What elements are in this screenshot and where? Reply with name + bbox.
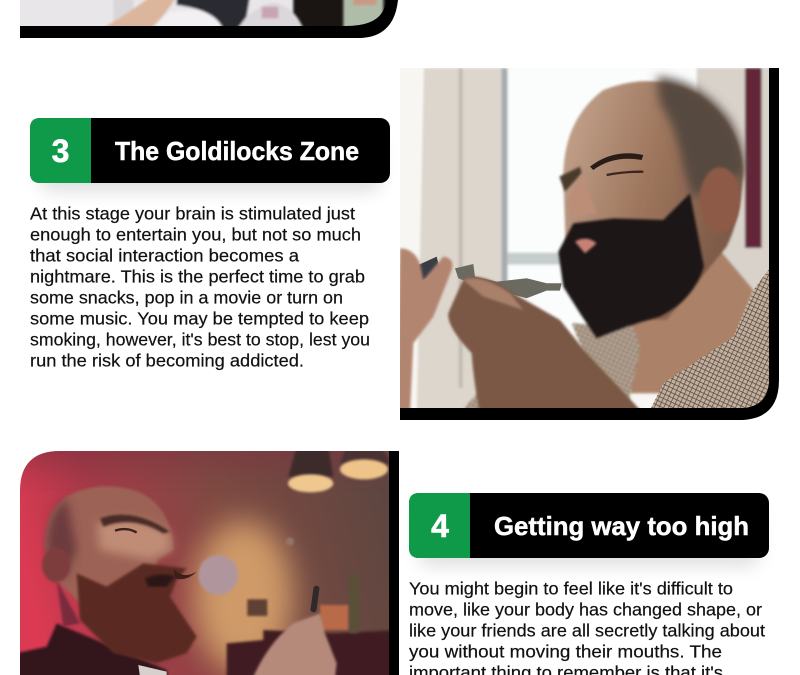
text block: section 3 body xyxy=(30,204,370,370)
vapour puff xyxy=(198,555,238,595)
heading: The Goldilocks Zone: 3 xyxy=(52,133,69,169)
shelf and items xyxy=(227,630,400,675)
text block: section 4 body xyxy=(409,578,765,675)
beard xyxy=(77,563,197,663)
text block: section 3 body: enough to entertain you, but not so much xyxy=(30,224,361,244)
lamp lights xyxy=(288,474,333,492)
brow and eye xyxy=(100,515,170,533)
heading: Getting way too high: 4 xyxy=(431,508,449,544)
lips xyxy=(575,239,597,253)
shirt xyxy=(460,323,640,413)
neck xyxy=(626,252,754,395)
image: bearded man exhaling vapour in red light xyxy=(20,451,399,675)
warm wall glow xyxy=(193,520,293,673)
image: previous section photo with black frame xyxy=(0,0,398,38)
lamp shades xyxy=(288,447,333,477)
vape xyxy=(310,585,320,613)
text block: section 4 body: You might begin to feel like it's difficult to xyxy=(409,578,733,598)
heading: The Goldilocks Zone: The Goldilocks Zone xyxy=(115,136,359,166)
neck xyxy=(57,580,80,627)
heading shadow xyxy=(40,135,380,191)
heading shadow xyxy=(419,510,759,566)
panel: section 4 xyxy=(409,493,769,675)
heading: Getting way too high: Getting way too high xyxy=(494,511,749,541)
ear xyxy=(700,167,740,233)
heading: The Goldilocks Zone xyxy=(30,118,390,183)
text block: section 4 body: you without moving their mouths. The xyxy=(409,642,722,662)
text block: section 3 body: run the risk of becoming addicted. xyxy=(30,350,304,370)
heading: Getting way too high xyxy=(409,493,769,558)
text block: section 3 body: some snacks, pop in a movie or turn on xyxy=(30,288,343,308)
text block: section 3 body: smoking, however, it's best to stop, lest you xyxy=(30,330,370,350)
text block: section 4 body: move, like your body has changed shape, or xyxy=(409,600,762,620)
dark upper wall xyxy=(22,451,389,480)
hands xyxy=(397,248,452,413)
text block: section 3 body: nightmare. This is the perfect time to grab xyxy=(30,266,365,286)
hand xyxy=(247,613,337,675)
nose xyxy=(576,174,596,214)
text block: section 3 body: At this stage your brain is stimulated just xyxy=(30,204,355,224)
panel: section 3 xyxy=(30,118,390,370)
shirt xyxy=(0,623,170,675)
pipe xyxy=(455,264,562,298)
image: bearded man holding a pipe xyxy=(397,68,779,420)
mustache tip xyxy=(173,568,197,579)
head xyxy=(45,486,173,613)
text block: section 4 body: like your friends are all secretly talking about xyxy=(409,620,765,640)
beard xyxy=(558,193,704,338)
eyebrows and eyes xyxy=(590,153,643,170)
text block: section 3 body: some music. You may be tempted to keep xyxy=(30,308,369,328)
text block: section 3 body: that social interaction becomes a xyxy=(30,246,299,266)
head xyxy=(563,81,743,320)
hair stubble xyxy=(657,77,744,200)
